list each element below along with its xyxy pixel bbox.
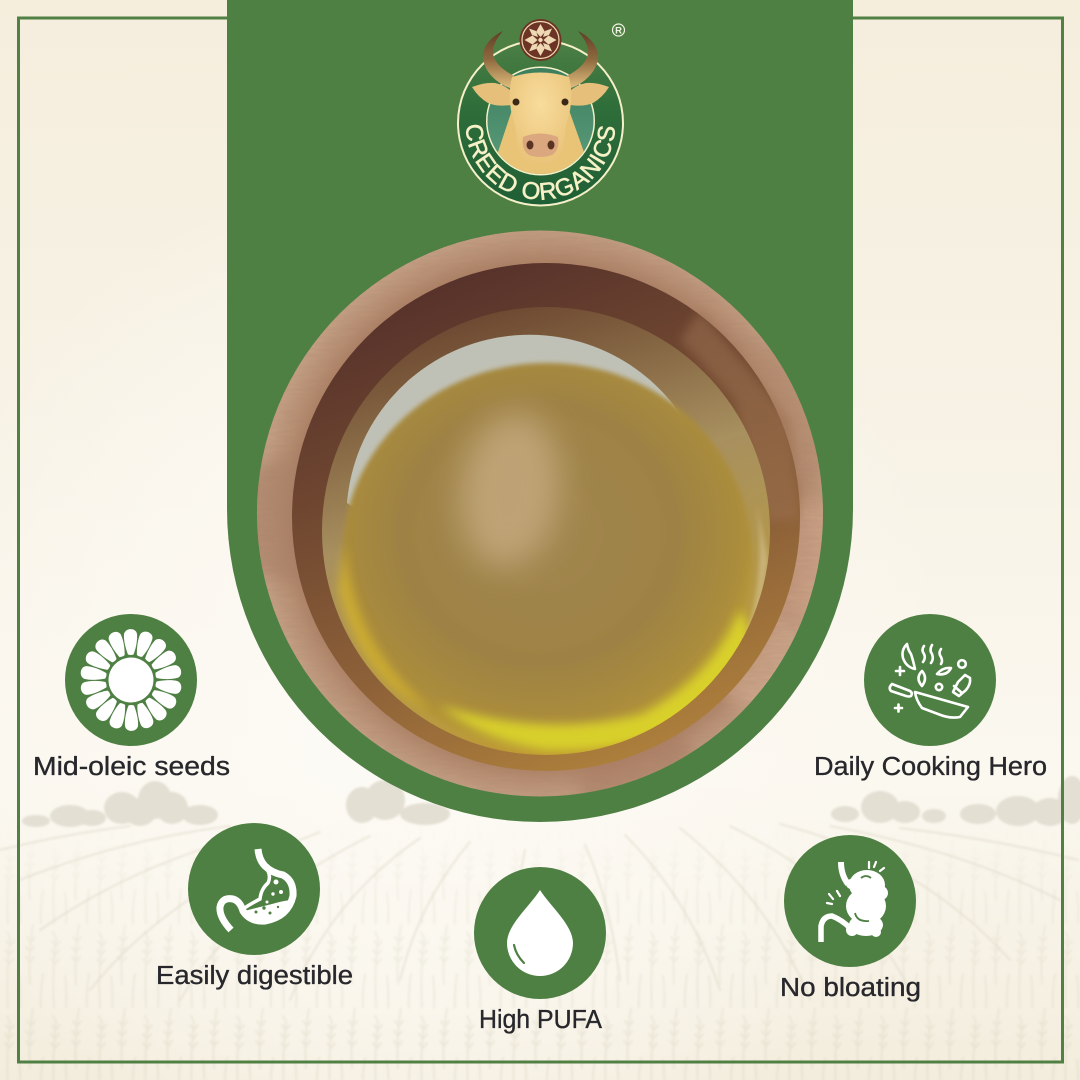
logo: Creed Organics xyxy=(457,19,626,206)
label: Easily digestible: Easily digestible xyxy=(156,962,353,990)
icon: stomach xyxy=(188,823,320,955)
label: Mid-oleic seeds: Mid-oleic seeds xyxy=(33,753,230,781)
label: Daily Cooking Hero: Daily Cooking Hero xyxy=(814,753,1047,781)
feature: No bloating xyxy=(780,835,921,1002)
logo horns xyxy=(483,31,598,88)
label: High PUFA: High PUFA xyxy=(479,1006,602,1034)
label: No bloating: No bloating xyxy=(780,974,921,1002)
feature: Daily Cooking Hero xyxy=(814,614,1047,781)
oil surface xyxy=(322,307,770,755)
feature: Mid-oleic seeds xyxy=(33,614,230,781)
oil reflected highlight xyxy=(450,406,570,574)
logo rosette emblem xyxy=(520,19,562,61)
logo ears xyxy=(472,83,609,106)
registered mark xyxy=(612,24,624,36)
icon: sunflower seeds xyxy=(65,614,197,746)
feature: High PUFA xyxy=(474,867,606,1034)
icon: oil drop xyxy=(474,867,606,999)
background: wheat field xyxy=(0,820,1080,1080)
green arch panel xyxy=(227,0,853,822)
reflection crescent xyxy=(347,335,686,540)
icon: bloated intestine xyxy=(784,835,916,967)
logo cow head xyxy=(510,72,571,163)
bowl inner wall xyxy=(292,263,800,771)
logo cow body xyxy=(498,112,584,174)
background: distant trees xyxy=(22,776,1080,827)
logo cow face xyxy=(512,98,568,157)
oil yellow glow xyxy=(338,500,768,750)
bowl rim xyxy=(257,230,823,796)
registered mark: R xyxy=(615,26,622,36)
feature: Easily digestible xyxy=(156,823,353,990)
oil golden pool xyxy=(342,363,752,749)
logo badge ring xyxy=(457,40,624,206)
logo wordmark: CREED ORGANICS xyxy=(466,124,616,200)
icon: cooking pan xyxy=(864,614,996,746)
wooden bowl of oil xyxy=(257,230,823,796)
